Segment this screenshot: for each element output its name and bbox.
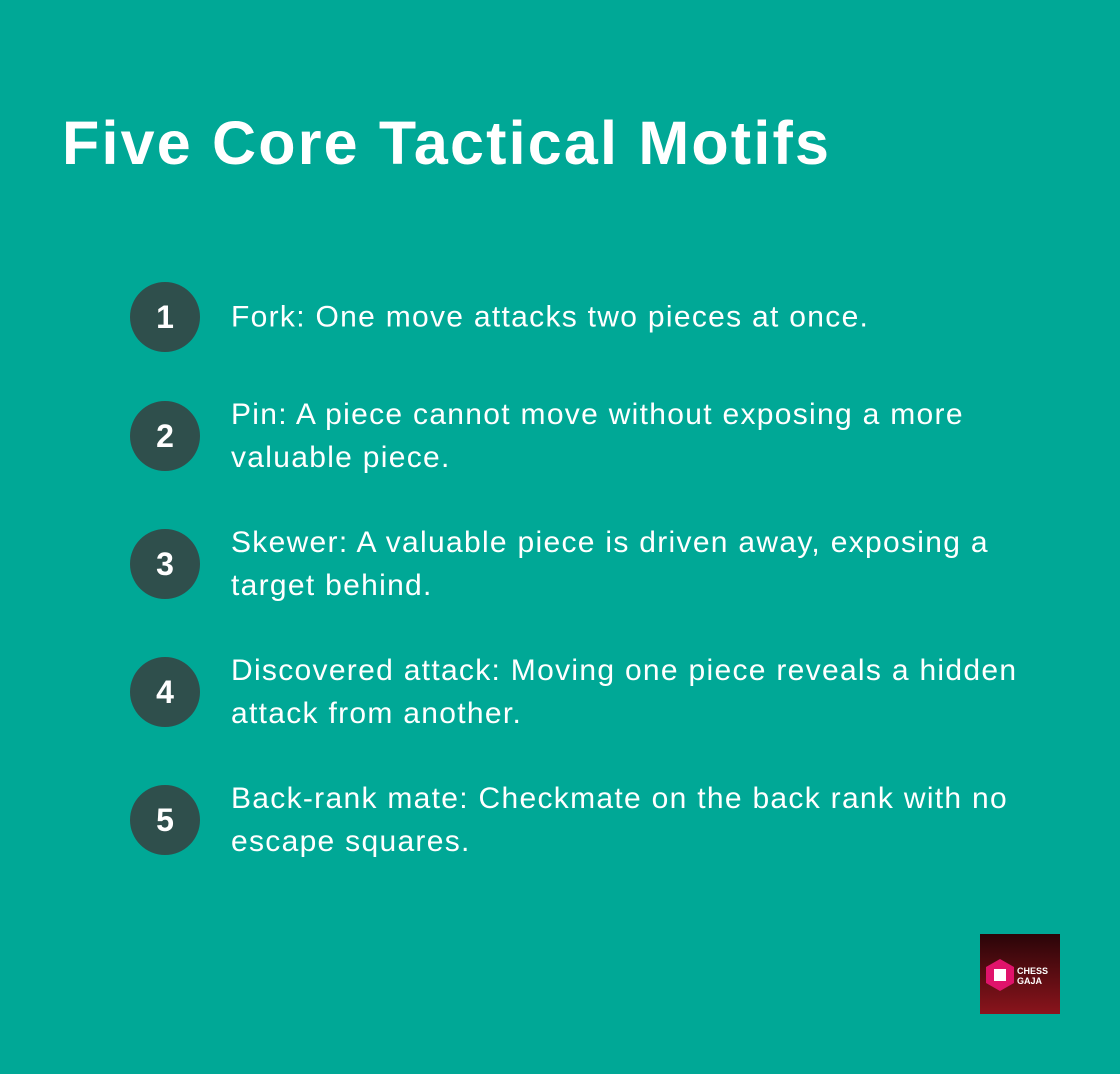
text 2: Pin: A piece cannot move without exposing a more — [231, 398, 964, 431]
text 5 — [231, 782, 1008, 858]
item 2 — [130, 398, 964, 474]
number 1 — [130, 282, 200, 352]
number 4 — [130, 657, 200, 727]
logo — [980, 934, 1060, 1014]
text 4 — [231, 654, 1017, 730]
number 2: 2 — [156, 418, 174, 454]
text 4: Discovered attack: Moving one piece reveals a hidden — [231, 654, 1017, 687]
number 4: 4 — [156, 674, 174, 710]
item 3 — [130, 526, 989, 602]
text 3: Skewer: A valuable piece is driven away, exposing a — [231, 526, 989, 559]
item 4 — [130, 654, 1017, 730]
number 5 — [130, 785, 200, 855]
text 4: attack from another. — [231, 697, 522, 730]
logo text: CHESS — [1017, 966, 1048, 976]
item 1 — [130, 282, 869, 352]
text 1: Fork: One move attacks two pieces at once. — [231, 300, 869, 334]
number 3 — [130, 529, 200, 599]
number 3: 3 — [156, 546, 174, 582]
number 2 — [130, 401, 200, 471]
logo icon — [986, 959, 1014, 991]
item 5 — [130, 782, 1008, 858]
text 5: Back-rank mate: Checkmate on the back rank with no — [231, 782, 1008, 815]
number 5: 5 — [156, 802, 174, 838]
logo text — [1017, 966, 1048, 986]
text 3 — [231, 526, 989, 602]
logo text: GAJA — [1017, 976, 1042, 986]
text 2: valuable piece. — [231, 441, 451, 474]
text 2 — [231, 398, 964, 474]
text 3: target behind. — [231, 569, 433, 602]
title: Five Core Tactical Motifs — [62, 109, 831, 177]
text 5: escape squares. — [231, 825, 471, 858]
number 1: 1 — [156, 299, 174, 335]
